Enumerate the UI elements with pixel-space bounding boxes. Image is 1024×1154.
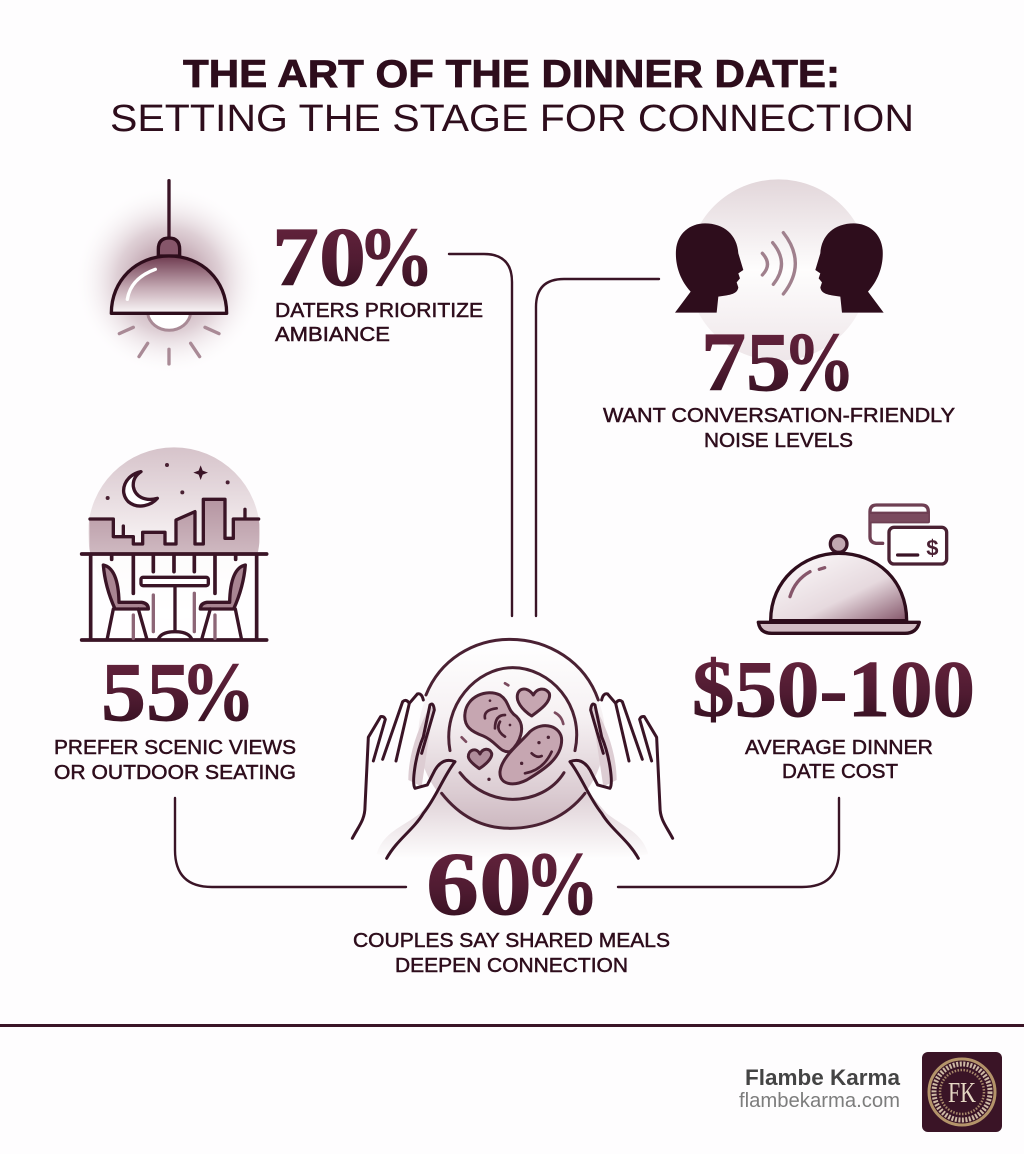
icon: rooftop terrace table at night xyxy=(82,447,267,640)
icon: two heads in conversation xyxy=(675,179,884,361)
icon: cloche and payment cards xyxy=(758,505,947,633)
footer brand text xyxy=(739,1065,901,1112)
stat: 70% daters prioritize ambiance: DATERS PRIORITIZE xyxy=(275,300,483,322)
icon: plate inner ring xyxy=(449,668,577,799)
icon: food xyxy=(465,693,522,752)
footer brand text: flambekarma.com xyxy=(739,1090,900,1112)
stat: 55% prefer scenic views: 55 xyxy=(101,646,191,739)
icon: right head xyxy=(815,223,884,313)
icon: cloche and payment cards: $ xyxy=(926,536,938,561)
connector: ambiance to plate xyxy=(449,254,512,616)
stat: 60% couples say shared meals deepen connection: COUPLES SAY SHARED MEALS xyxy=(353,930,670,952)
stat: 75% conversation-friendly noise levels: % xyxy=(783,316,855,409)
stat: 70% daters prioritize ambiance xyxy=(272,211,483,346)
connector: dinner cost to shared meals xyxy=(618,798,839,887)
icon: crescent moon xyxy=(124,472,157,506)
icon: tray xyxy=(758,622,919,633)
footer brand text: Flambe Karma xyxy=(745,1065,901,1090)
stat: $50-100 average dinner date cost xyxy=(692,646,975,783)
icon: bill with dollar xyxy=(889,527,947,564)
stat: $50-100 average dinner date cost: DATE COST xyxy=(782,761,898,783)
connector: conversation to plate xyxy=(536,279,659,616)
stat: 60% couples say shared meals deepen connection xyxy=(353,835,670,977)
stat: 60% couples say shared meals deepen connection: 60 xyxy=(426,835,532,934)
icon: table xyxy=(141,577,208,586)
connector: scenic views to shared meals xyxy=(175,798,406,887)
stat: 70% daters prioritize ambiance: AMBIANCE xyxy=(275,324,390,346)
stat: 75% conversation-friendly noise levels: WANT CONVERSATION-FRIENDLY xyxy=(603,405,955,427)
stat: 75% conversation-friendly noise levels: NOISE LEVELS xyxy=(704,430,853,452)
icon: left chair xyxy=(103,565,148,638)
stat: 75% conversation-friendly noise levels: 75 xyxy=(701,316,791,409)
icon: left hand xyxy=(352,694,455,858)
icon: right hand xyxy=(570,694,673,858)
icon: plate shadow xyxy=(377,790,648,861)
icon: railing xyxy=(82,554,267,640)
stat: 60% couples say shared meals deepen connection: DEEPEN CONNECTION xyxy=(395,955,628,977)
stat: 70% daters prioritize ambiance: 70 xyxy=(272,211,366,304)
stat: 60% couples say shared meals deepen connection: % xyxy=(525,835,599,934)
stat: 55% prefer scenic views: % xyxy=(181,646,255,739)
icon: star and dots xyxy=(193,465,208,480)
stat: 70% daters prioritize ambiance: % xyxy=(358,211,434,304)
stat: 55% prefer scenic views xyxy=(54,646,296,784)
title: THE ART OF THE DINNER DATE: xyxy=(183,53,840,96)
stat: 55% prefer scenic views: OR OUTDOOR SEATING xyxy=(54,762,296,784)
icon: sound waves xyxy=(762,233,795,294)
icon: right chair xyxy=(200,565,245,638)
icon: credit card xyxy=(870,505,928,543)
icon: left head xyxy=(675,223,743,313)
footer divider xyxy=(0,1024,1024,1027)
title: SETTING THE STAGE FOR CONNECTION xyxy=(110,98,914,140)
title xyxy=(110,53,914,140)
stat: 55% prefer scenic views: PREFER SCENIC VIEWS xyxy=(54,737,296,759)
logo xyxy=(922,1052,1002,1132)
stat: $50-100 average dinner date cost: $50-100 xyxy=(692,646,975,734)
stat: 75% conversation-friendly noise levels xyxy=(603,316,955,452)
icon: plate rim xyxy=(426,639,598,828)
logo: FK xyxy=(948,1078,976,1109)
icon: shared plate with hands xyxy=(352,639,673,861)
icon: pendant lamp xyxy=(74,181,264,375)
stat: $50-100 average dinner date cost: AVERAGE DINNER xyxy=(745,737,933,759)
icon: cloche dome xyxy=(830,536,847,552)
